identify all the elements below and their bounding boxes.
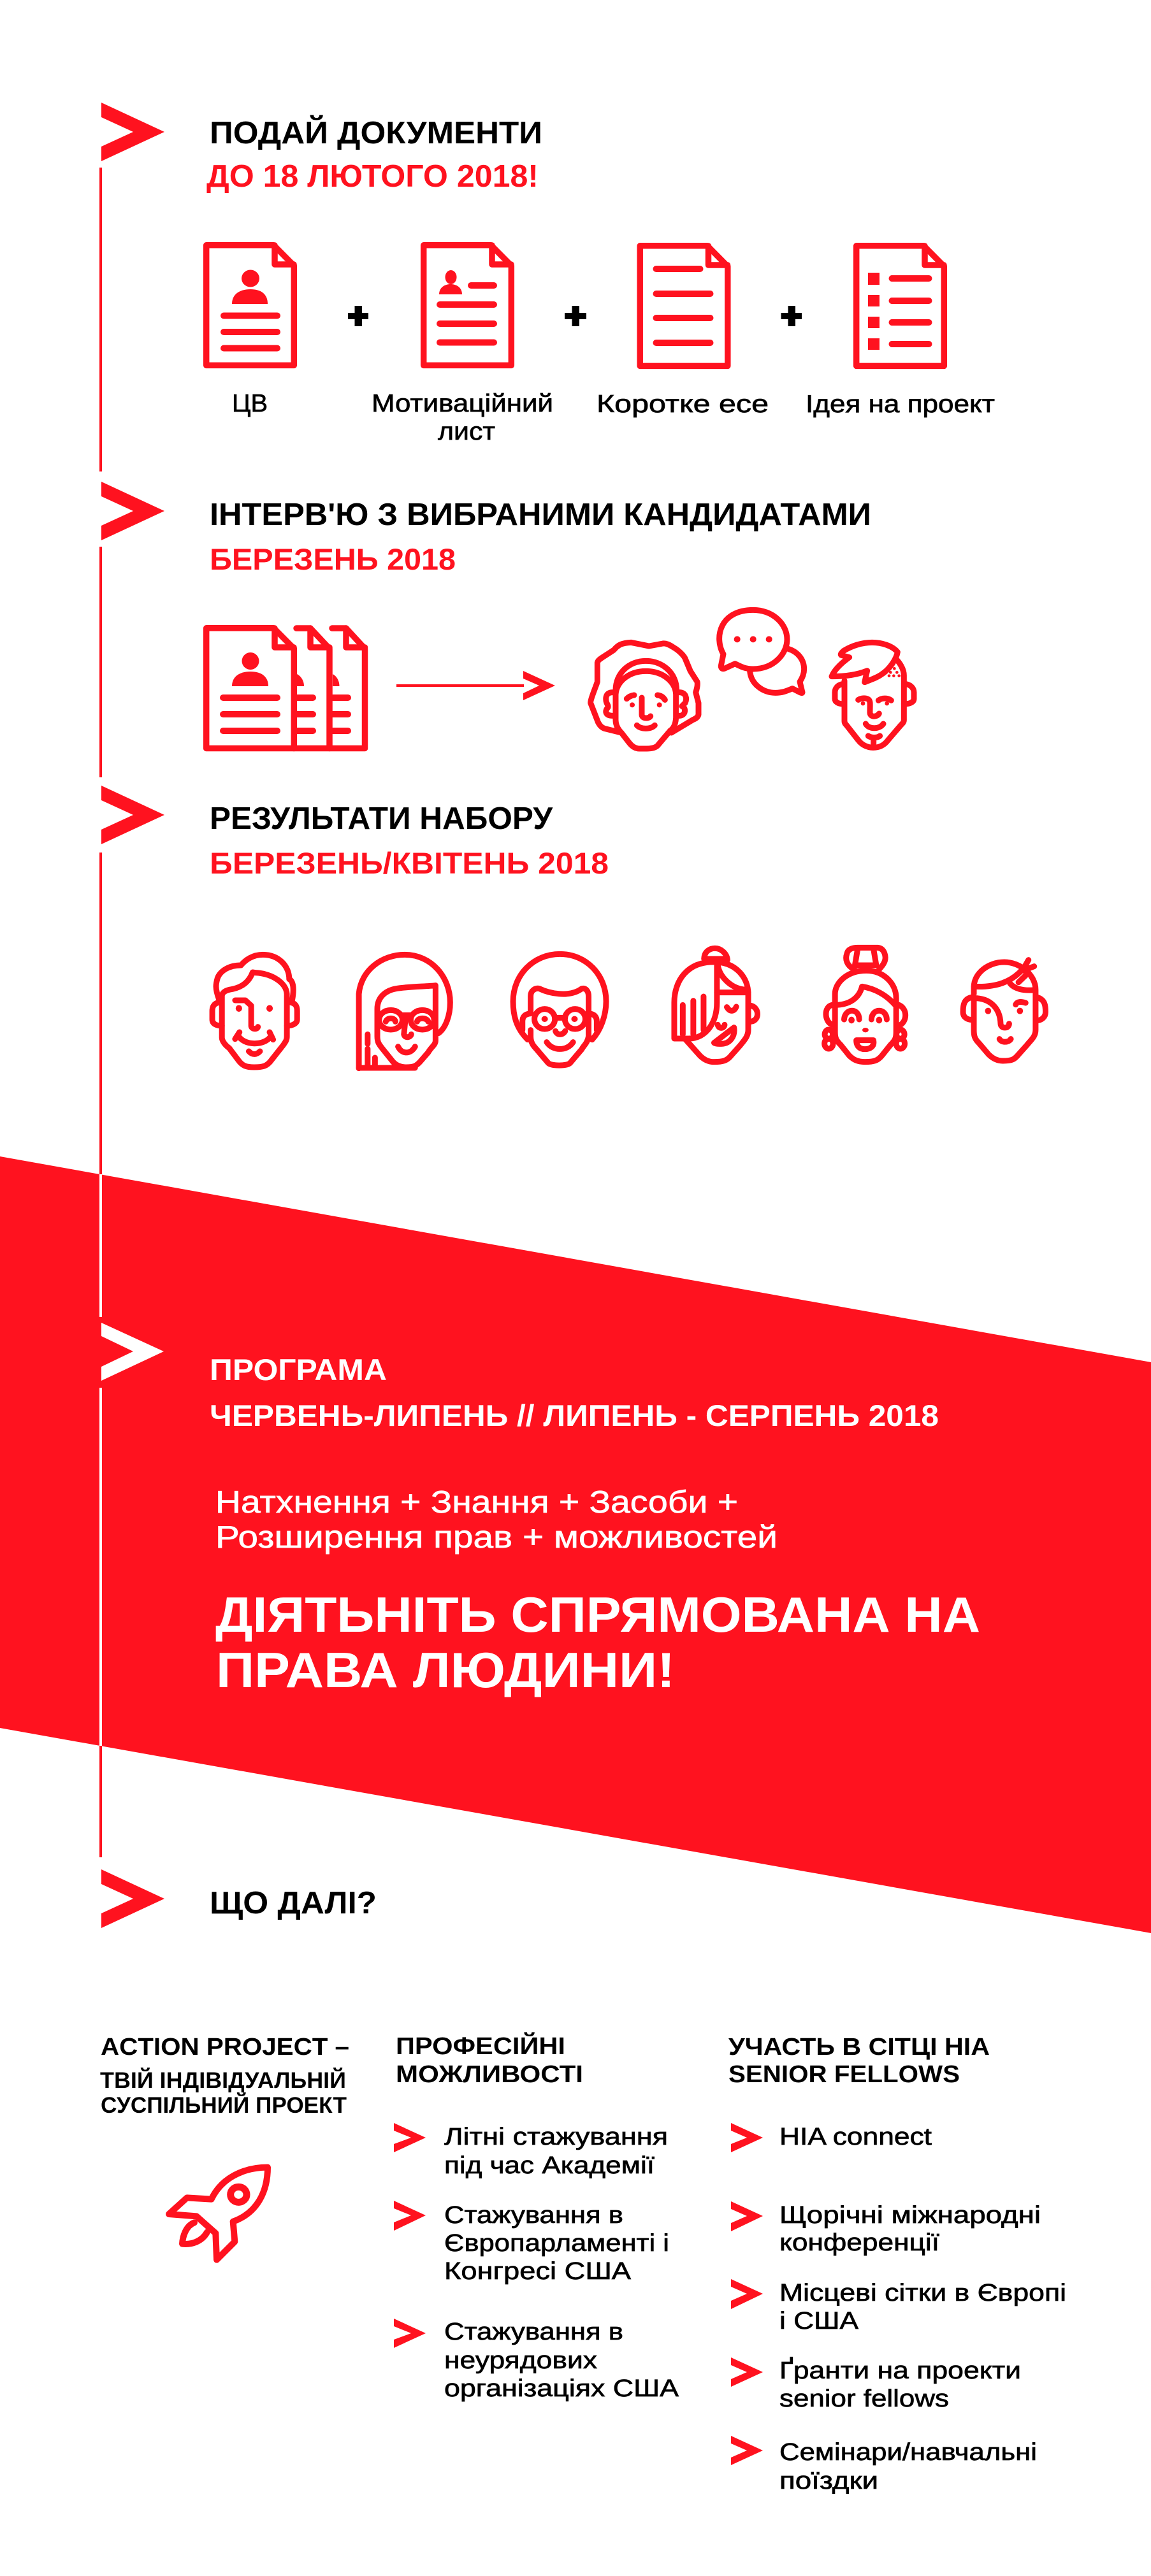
- list item: annual conferences: [731, 2201, 1041, 2256]
- label: motivation letter: [372, 390, 553, 445]
- text block: action project description: СУСПІЛЬНИЙ ПРОЕКТ: [101, 2092, 347, 2118]
- icon: motivation letter document: [424, 245, 511, 365]
- heading: professional opportunities: [396, 2031, 583, 2088]
- heading: step 3: РЕЗУЛЬТАТИ НАБОРУ: [210, 802, 553, 836]
- icon: step 4 white chevron: [101, 1323, 164, 1381]
- list item: NGO internships: організаціях США: [444, 2375, 679, 2402]
- list item: annual conferences: Щорічні міжнародні: [779, 2202, 1041, 2229]
- icon: plus 1: [348, 306, 368, 326]
- text block: programme components: Розширення прав + можливостей: [215, 1520, 778, 1555]
- text block: action project description: [100, 2068, 347, 2118]
- subheading: step 2 date: БЕРЕЗЕНЬ 2018: [210, 542, 456, 576]
- subheading: step 4 dates: ЧЕРВЕНЬ-ЛИПЕНЬ // ЛИПЕНЬ - СЕРПЕНЬ 2018: [210, 1399, 939, 1432]
- icon: face woman with side fringe: [674, 948, 758, 1062]
- arrow: documents to interview: [396, 671, 555, 700]
- list item: HIA connect: HIA connect: [779, 2124, 932, 2150]
- red diagonal band: [0, 1156, 1151, 1933]
- list item: European Parliament internships: Європарламенті і: [444, 2230, 669, 2257]
- panel: action project column: [100, 2034, 349, 2260]
- heading: step 1: ПОДАЙ ДОКУМЕНТИ: [210, 115, 542, 150]
- heading: professional opportunities: МОЖЛИВОСТІ: [396, 2061, 583, 2088]
- list item: seminars and study trips: [731, 2436, 1037, 2494]
- panel: step 5 what next: [101, 1869, 377, 1928]
- panel: step 3 selection results: [101, 786, 1046, 1069]
- icon: face man with wavy hair: [212, 954, 297, 1067]
- heading: senior fellows network: [728, 2034, 990, 2088]
- list item: local networks: і США: [779, 2308, 859, 2335]
- label: short essay: Коротке есе: [597, 391, 769, 418]
- panel: step 4 programme: [101, 1323, 980, 1698]
- label: motivation letter: лист: [438, 418, 495, 445]
- subheading: step 3 date: БЕРЕЗЕНЬ/КВІТЕНЬ 2018: [210, 846, 609, 880]
- list item: NGO internships: [394, 2319, 679, 2402]
- text block: programme components: [215, 1485, 778, 1555]
- panel: step 2 interviews: [101, 482, 914, 749]
- icon: stack of documents: [206, 628, 365, 748]
- slogan: ПРАВА ЛЮДИНИ!: [216, 1642, 675, 1698]
- list item: European Parliament internships: Стажування в: [444, 2202, 623, 2229]
- list item: project grants: [731, 2356, 1021, 2412]
- list item: HIA connect: [731, 2123, 932, 2152]
- icon: CV document: [206, 245, 294, 365]
- list item: local networks: Місцеві сітки в Європі: [779, 2280, 1066, 2306]
- icon: plus 2: [565, 306, 586, 326]
- text block: action project description: ТВІЙ ІНДІВІДУАЛЬНІЙ: [100, 2068, 346, 2093]
- icon: step 3 chevron: [101, 786, 164, 844]
- icon: face with round glasses: [513, 954, 606, 1065]
- list item: local networks: [731, 2279, 1066, 2335]
- list item: project grants: senior fellows: [779, 2385, 949, 2412]
- list item: seminars and study trips: Семінари/навчальні: [779, 2439, 1037, 2466]
- list item: annual conferences: конференції: [779, 2229, 940, 2256]
- heading: professional opportunities: ПРОФЕСІЙНІ: [396, 2031, 565, 2060]
- list item: European Parliament internships: [394, 2201, 669, 2285]
- heading: step 2: ІНТЕРВ'Ю З ВИБРАНИМИ КАНДИДАТАМИ: [210, 498, 871, 532]
- heading: step 4: ПРОГРАМА: [210, 1353, 387, 1386]
- icon: step 2 chevron: [101, 482, 164, 540]
- icon: rocket: [169, 2168, 268, 2260]
- icon: interviewer face with curly hair: [591, 642, 699, 749]
- text block: programme components: Натхнення + Знання + Засоби +: [215, 1485, 738, 1520]
- list item: NGO internships: неурядових: [444, 2347, 597, 2374]
- icon: short essay document: [640, 246, 728, 366]
- list item: summer internships: Літні стажування: [444, 2124, 668, 2150]
- icon: face woman with glasses and long hair: [359, 954, 450, 1069]
- list item: summer internships: під час Академії: [444, 2152, 655, 2179]
- list item: European Parliament internships: Конгресі США: [444, 2258, 632, 2285]
- panel: senior fellows network column: [728, 2034, 1066, 2494]
- icon: face man with cap: [963, 960, 1046, 1061]
- label: project idea: Ідея на проект: [806, 391, 995, 418]
- heading: senior fellows network: УЧАСТЬ В СІТЦІ HIA: [728, 2034, 990, 2061]
- icon: step 1 chevron: [101, 103, 164, 161]
- list item: project grants: Ґранти на проекти: [779, 2356, 1021, 2384]
- slogan: [215, 1587, 980, 1698]
- slogan: ДІЯТЬНІТЬ СПРЯМОВАНА НА: [215, 1587, 980, 1643]
- heading: step 5: ЩО ДАЛІ?: [210, 1886, 377, 1920]
- icon: plus 3: [781, 306, 802, 326]
- heading: senior fellows network: SENIOR FELLOWS: [728, 2061, 960, 2088]
- heading: action project: ACTION PROJECT –: [101, 2034, 349, 2061]
- list item: NGO internships: Стажування в: [444, 2319, 623, 2345]
- icon: speech bubbles: [720, 610, 804, 693]
- icon: step 5 chevron: [101, 1869, 164, 1928]
- label: motivation letter: Мотиваційний: [372, 390, 553, 417]
- icon: candidate face with quiff: [832, 642, 914, 747]
- subheading: step 1 deadline: ДО 18 ЛЮТОГО 2018!: [206, 159, 539, 194]
- panel: step 1 submit documents: [101, 103, 995, 445]
- list item: seminars and study trips: поїздки: [779, 2468, 878, 2494]
- label: CV: ЦВ: [232, 390, 268, 417]
- timeline vertical line: [99, 168, 102, 1857]
- icon: face woman with bun: [825, 947, 906, 1062]
- panel: professional opportunities column: [394, 2031, 679, 2402]
- icon: project idea document: [857, 246, 944, 366]
- list item: summer internships: [394, 2123, 668, 2179]
